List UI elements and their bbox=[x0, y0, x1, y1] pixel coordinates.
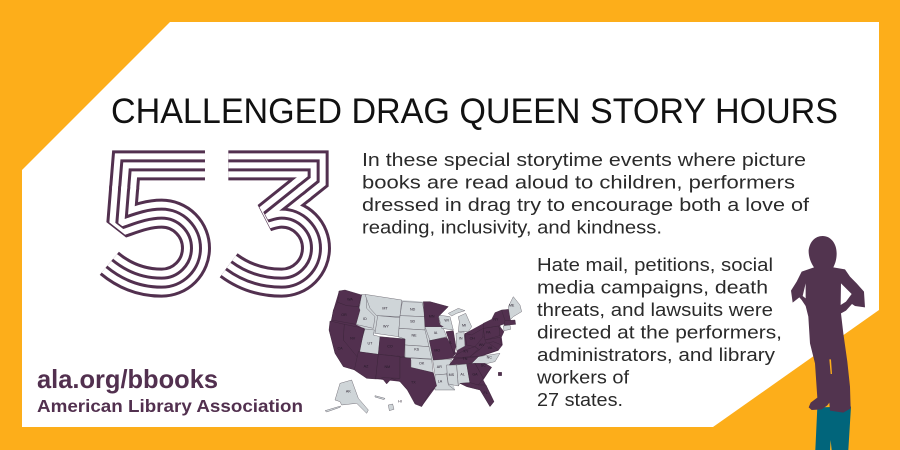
paragraph about hate mail and threats: 27 states. bbox=[537, 389, 623, 410]
intro paragraph: dressed in drag try to encourage both a love of bbox=[362, 194, 810, 215]
US map of affected states bbox=[325, 290, 522, 413]
state abbreviations: NC bbox=[487, 356, 492, 360]
state abbreviations: UT bbox=[368, 341, 373, 345]
state abbreviations: KS bbox=[414, 348, 420, 352]
state abbreviations: MS bbox=[449, 373, 455, 377]
state abbreviations: WI bbox=[444, 319, 449, 323]
state abbreviations: OH bbox=[470, 336, 475, 340]
state abbreviations: ME bbox=[509, 304, 515, 308]
state abbreviations: MT bbox=[382, 306, 388, 310]
state abbreviations: WV bbox=[479, 343, 485, 347]
state abbreviations: GA bbox=[472, 372, 478, 376]
legs in teal bbox=[815, 407, 851, 450]
intro paragraph: books are read aloud to children, performers bbox=[362, 172, 795, 192]
state abbreviations: NY bbox=[493, 318, 499, 322]
state abbreviations: CO bbox=[387, 344, 393, 348]
state abbreviations: SD bbox=[410, 320, 416, 324]
organization name: American Library Association bbox=[37, 396, 303, 416]
paragraph about hate mail and threats bbox=[536, 254, 782, 410]
state abbreviations: NM bbox=[384, 365, 390, 369]
state abbreviations: SC bbox=[481, 364, 486, 368]
state abbreviations: IN bbox=[459, 336, 463, 340]
state abbreviations: AK bbox=[346, 390, 351, 394]
state abbreviations: ND bbox=[410, 308, 416, 312]
state abbreviations: IA bbox=[434, 331, 438, 335]
state abbreviations: OR bbox=[341, 313, 347, 317]
intro paragraph bbox=[362, 149, 810, 238]
state abbreviations: AL bbox=[460, 372, 465, 376]
state abbreviations: NV bbox=[350, 336, 356, 340]
state abbreviations: KY bbox=[464, 350, 469, 354]
state abbreviations: VA bbox=[488, 346, 493, 350]
state abbreviations: CA bbox=[337, 346, 343, 350]
state abbreviations: HI bbox=[398, 400, 402, 404]
paragraph about hate mail and threats: directed at the performers, bbox=[537, 322, 782, 342]
state abbreviations: ID bbox=[363, 317, 367, 321]
body in purple bbox=[791, 236, 865, 413]
map underlay filling gaps between states bbox=[329, 291, 503, 407]
state abbreviations: PA bbox=[486, 330, 491, 334]
paragraph about hate mail and threats: media campaigns, death bbox=[537, 276, 768, 298]
state abbreviations: TX bbox=[411, 380, 416, 384]
paragraph about hate mail and threats: Hate mail, petitions, social bbox=[537, 254, 773, 275]
state abbreviations: AZ bbox=[364, 364, 369, 368]
state abbreviations: MO bbox=[434, 348, 440, 352]
state abbreviations: TN bbox=[463, 357, 468, 361]
state abbreviations: MI bbox=[462, 324, 466, 328]
state abbreviations: MN bbox=[429, 314, 435, 318]
state abbreviations: WY bbox=[383, 324, 389, 328]
paragraph about hate mail and threats: threats, and lawsuits were bbox=[537, 299, 773, 320]
big number 53 bbox=[109, 165, 316, 283]
state abbreviations: OK bbox=[419, 362, 425, 366]
paragraph about hate mail and threats: workers of bbox=[536, 366, 630, 388]
state abbreviations: FL bbox=[484, 391, 488, 395]
states with challenges bbox=[329, 290, 516, 407]
intro paragraph: reading, inclusivity, and kindness. bbox=[362, 216, 662, 238]
state abbreviations: NE bbox=[411, 334, 417, 338]
state abbreviations: IL bbox=[449, 340, 452, 344]
intro paragraph: In these special storytime events where picture bbox=[362, 149, 806, 170]
website link: ala.org/bbooks bbox=[37, 364, 218, 394]
title: CHALLENGED DRAG QUEEN STORY HOURS bbox=[111, 92, 838, 131]
silhouette figure bbox=[791, 236, 865, 450]
state abbreviations: WA bbox=[347, 298, 353, 302]
paragraph about hate mail and threats: administrators, and library bbox=[537, 344, 776, 365]
state abbreviations: LA bbox=[438, 380, 443, 384]
states without challenges bbox=[325, 294, 522, 413]
state abbreviations: AR bbox=[437, 365, 442, 369]
state abbreviations bbox=[337, 298, 515, 404]
